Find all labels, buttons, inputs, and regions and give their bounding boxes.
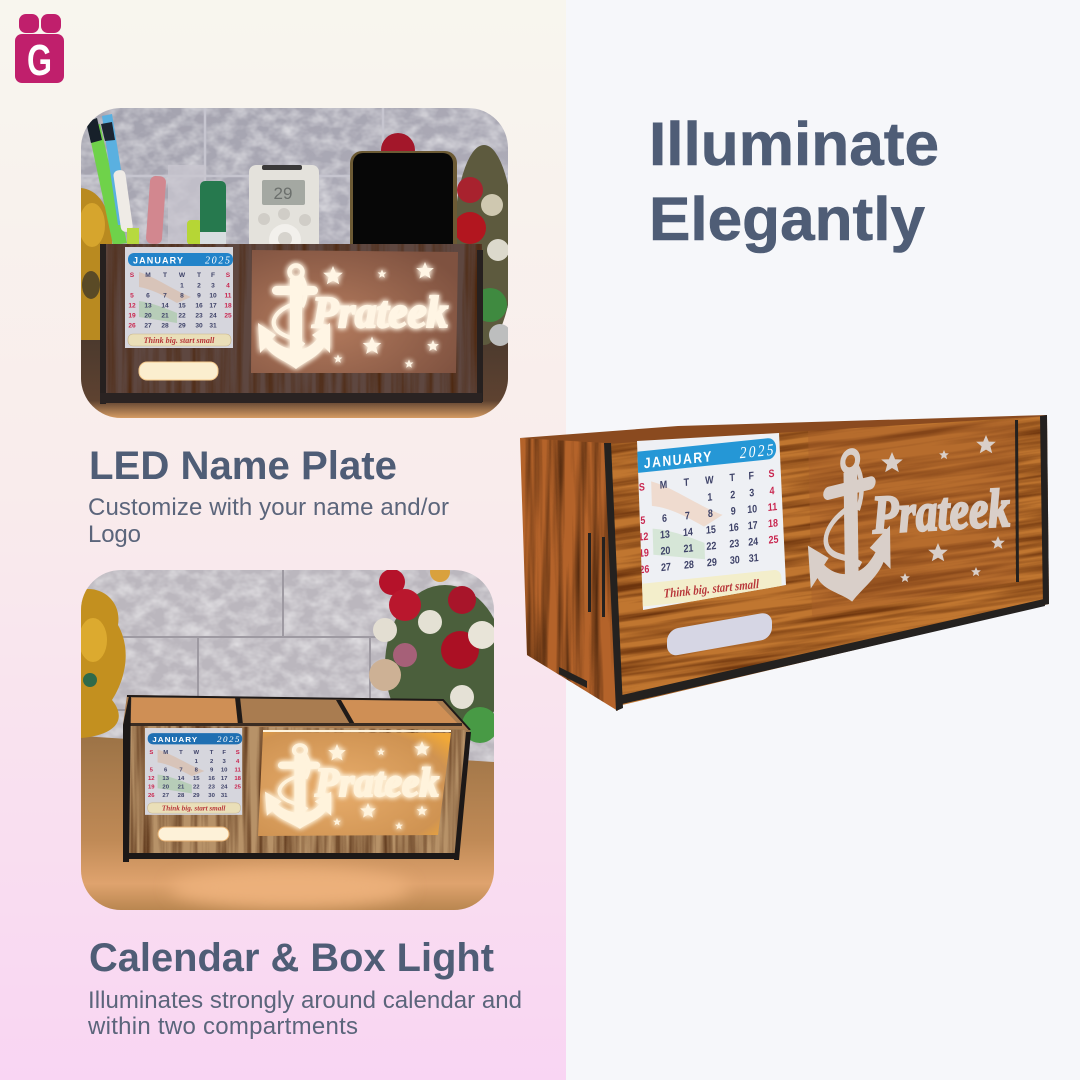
icon: gift logo with G bbox=[15, 14, 64, 85]
calendar card: JANUARY bbox=[644, 448, 712, 471]
calendar card: 6 bbox=[164, 768, 168, 773]
calendar card: 30 bbox=[730, 554, 740, 567]
calendar card: 5 bbox=[130, 292, 134, 300]
title: Illuminate Elegantly: Illuminate bbox=[649, 110, 939, 178]
calendar card: 25 bbox=[768, 534, 779, 547]
calendar card: 27 bbox=[162, 793, 169, 799]
calendar card: 24 bbox=[748, 536, 759, 549]
text block: box light description: within two compartments bbox=[87, 1013, 358, 1040]
calendar card: 12 bbox=[128, 302, 136, 310]
calendar card: 8 bbox=[180, 292, 184, 300]
calendar card: S bbox=[130, 272, 135, 279]
calendar card: M bbox=[145, 272, 151, 279]
gold figurine bbox=[81, 188, 114, 340]
calendar card bbox=[125, 247, 233, 348]
calendar card: 20 bbox=[162, 785, 169, 791]
calendar card: M bbox=[163, 750, 168, 756]
calendar card: 29 bbox=[193, 793, 200, 799]
calendar card: 9 bbox=[731, 506, 736, 518]
calendar card: 21 bbox=[161, 312, 169, 320]
text block: name plate description: Logo bbox=[88, 521, 141, 548]
glowing pill window bbox=[158, 827, 229, 841]
wooden box body bbox=[100, 244, 483, 404]
title: Illuminate Elegantly: Elegantly bbox=[649, 185, 925, 253]
calendar card: 7 bbox=[179, 768, 183, 773]
calendar card: 7 bbox=[163, 292, 167, 300]
heading: LED Name Plate: LED Name Plate bbox=[89, 444, 397, 488]
photo: illuminated organiser on table bbox=[79, 562, 505, 910]
glowing name panel bbox=[258, 730, 451, 836]
calendar card: 25 bbox=[234, 785, 242, 791]
calendar card: 18 bbox=[768, 518, 779, 531]
calendar card: S bbox=[236, 750, 240, 756]
calendar card: 29 bbox=[178, 322, 186, 330]
calendar card: 21 bbox=[178, 785, 185, 791]
calendar card: 25 bbox=[224, 312, 232, 320]
calendar card: T bbox=[729, 472, 735, 485]
box front bbox=[123, 696, 471, 862]
calendar card: 11 bbox=[225, 292, 232, 300]
calendar card: F bbox=[222, 750, 226, 756]
calendar card: 10 bbox=[209, 292, 217, 300]
calendar card: 10 bbox=[747, 503, 758, 516]
calendar card: 9 bbox=[197, 292, 201, 300]
calendar card: 27 bbox=[661, 561, 672, 574]
panel: right background bbox=[566, 0, 1080, 1080]
calendar card: 22 bbox=[193, 785, 200, 791]
calendar card: 6 bbox=[662, 513, 668, 525]
calendar card: F bbox=[748, 470, 754, 483]
calendar card: 12 bbox=[148, 776, 155, 782]
glowing name panel: Prateek bbox=[314, 759, 439, 805]
glowing pill window bbox=[139, 362, 218, 380]
calendar card: 31 bbox=[209, 322, 217, 330]
open wooden box compartments bbox=[123, 695, 470, 730]
calendar card: 1 bbox=[707, 492, 713, 504]
calendar card: 14 bbox=[161, 302, 169, 310]
flowers bbox=[369, 570, 494, 743]
calendar card: 11 bbox=[235, 768, 242, 773]
calendar card: 24 bbox=[209, 312, 217, 320]
calendar card: W bbox=[193, 750, 200, 756]
remote control bbox=[249, 165, 319, 244]
calendar card: 19 bbox=[128, 312, 136, 320]
panel: left gradient background bbox=[0, 0, 566, 1080]
calendar card: T bbox=[163, 272, 167, 279]
calendar card: 17 bbox=[221, 776, 227, 782]
text block: name plate description: Customize with your name and/or bbox=[88, 494, 449, 521]
calendar card: Think big. start small bbox=[663, 576, 760, 601]
calendar card: 30 bbox=[208, 793, 215, 799]
calendar card: 17 bbox=[209, 302, 217, 310]
calendar card: 5 bbox=[640, 515, 646, 527]
calendar card: 16 bbox=[208, 776, 216, 782]
calendar card: 2 bbox=[210, 759, 213, 765]
calendar card: Think big. start small bbox=[162, 805, 225, 813]
calendar card: 23 bbox=[729, 538, 740, 551]
calendar card: 16 bbox=[195, 302, 203, 310]
calendar card: 26 bbox=[128, 322, 136, 330]
calendar card: 7 bbox=[685, 510, 691, 523]
calendar card: 2 bbox=[730, 489, 736, 502]
calendar card: 15 bbox=[193, 776, 200, 782]
front panel bbox=[611, 416, 1049, 705]
unlit pill window bbox=[667, 611, 772, 657]
calendar card: 3 bbox=[749, 487, 755, 500]
calendar card: 17 bbox=[748, 520, 758, 533]
clear name plate with cut-outs: Prateek bbox=[870, 478, 1011, 545]
calendar card: 1 bbox=[180, 282, 184, 290]
black edges and slots bbox=[559, 415, 1049, 711]
calendar card: T bbox=[197, 272, 201, 279]
calendar card: 13 bbox=[660, 529, 671, 542]
calendar card: T bbox=[210, 750, 214, 756]
heading: Calendar and Box Light: Calendar & Box Light bbox=[89, 936, 494, 980]
calendar card: 19 bbox=[639, 547, 649, 560]
calendar card: T bbox=[684, 477, 689, 489]
calendar card: Think big. start small bbox=[144, 336, 215, 345]
calendar card: 15 bbox=[178, 302, 186, 310]
calendar card: 12 bbox=[638, 531, 649, 544]
calendar card: 30 bbox=[195, 322, 203, 330]
calendar card: 8 bbox=[708, 508, 713, 520]
calendar card: W bbox=[179, 272, 186, 279]
calendar card: 18 bbox=[224, 302, 232, 310]
glowing name panel bbox=[251, 250, 458, 373]
calendar card: 26 bbox=[639, 564, 650, 577]
calendar card: 28 bbox=[684, 559, 695, 572]
calendar card: 6 bbox=[146, 292, 150, 300]
top rim and interior bbox=[520, 415, 1047, 448]
calendar card: 14 bbox=[683, 526, 694, 539]
calendar card: 4 bbox=[769, 485, 775, 498]
calendar card: 13 bbox=[144, 302, 152, 310]
calendar card: 27 bbox=[144, 322, 152, 330]
calendar card: 11 bbox=[768, 501, 778, 514]
clear name plate with cut-outs bbox=[807, 420, 1015, 617]
calendar card: 22 bbox=[706, 540, 717, 553]
calendar card: 22 bbox=[178, 312, 186, 320]
calendar card: 5 bbox=[150, 768, 154, 773]
calendar card: 19 bbox=[148, 785, 155, 791]
calendar card: 2 bbox=[197, 282, 201, 290]
product: wooden desk organiser, unlit bbox=[520, 415, 1049, 711]
calendar card: 2025 bbox=[217, 734, 240, 744]
calendar card bbox=[145, 728, 242, 815]
calendar card: 4 bbox=[226, 282, 230, 290]
side panel bbox=[520, 438, 618, 711]
calendar card: 31 bbox=[749, 552, 759, 565]
calendar card: S bbox=[639, 481, 645, 494]
flowers bbox=[381, 133, 514, 346]
title: Illuminate Elegantly bbox=[649, 110, 939, 253]
calendar card: 20 bbox=[660, 545, 671, 558]
calendar card: 3 bbox=[223, 759, 227, 765]
calendar card: 9 bbox=[210, 768, 214, 773]
calendar card: 3 bbox=[211, 282, 215, 290]
calendar card: 29 bbox=[707, 557, 717, 570]
gold figurine bbox=[81, 589, 126, 738]
calendar card: 1 bbox=[195, 759, 199, 765]
calendar card: 28 bbox=[161, 322, 169, 330]
calendar card: 21 bbox=[683, 543, 694, 556]
calendar card: M bbox=[660, 479, 667, 492]
calendar card: JANUARY bbox=[133, 256, 183, 266]
calendar card: W bbox=[705, 474, 714, 487]
calendar card: 8 bbox=[195, 768, 199, 773]
text block: name plate description bbox=[88, 494, 449, 548]
calendar card: F bbox=[211, 272, 215, 279]
calendar card: 31 bbox=[221, 793, 228, 799]
calendar card: 28 bbox=[178, 793, 185, 799]
icon: gift logo with G: G bbox=[27, 36, 52, 85]
calendar card: 16 bbox=[729, 522, 739, 535]
calendar card: 2025 bbox=[739, 442, 774, 463]
calendar card bbox=[637, 433, 786, 610]
calendar card: 23 bbox=[195, 312, 203, 320]
calendar card: 14 bbox=[178, 776, 185, 782]
smartphone bbox=[350, 151, 457, 244]
calendar card: S bbox=[768, 468, 775, 481]
remote control: 29 bbox=[274, 184, 292, 203]
calendar card: 20 bbox=[144, 312, 152, 320]
calendar card: 24 bbox=[221, 785, 228, 791]
photo: LED name plate organiser with pens and phone bbox=[79, 108, 514, 418]
pens and markers bbox=[86, 114, 226, 245]
text block: box light description: Illuminates strongly around calendar and bbox=[88, 987, 522, 1014]
calendar card: 10 bbox=[221, 768, 227, 773]
calendar card: 15 bbox=[706, 524, 716, 537]
text block: box light description bbox=[87, 987, 522, 1040]
calendar card: S bbox=[149, 750, 153, 756]
calendar card: 4 bbox=[236, 759, 240, 765]
calendar card: 13 bbox=[162, 776, 170, 782]
calendar card: 2025 bbox=[205, 256, 230, 266]
calendar card: 23 bbox=[208, 785, 216, 791]
calendar card: JANUARY bbox=[152, 735, 198, 744]
calendar card: S bbox=[226, 272, 231, 279]
calendar card: 18 bbox=[234, 776, 242, 782]
glowing name panel: Prateek bbox=[311, 288, 448, 337]
calendar card: 26 bbox=[148, 793, 155, 799]
calendar card: T bbox=[179, 750, 183, 756]
